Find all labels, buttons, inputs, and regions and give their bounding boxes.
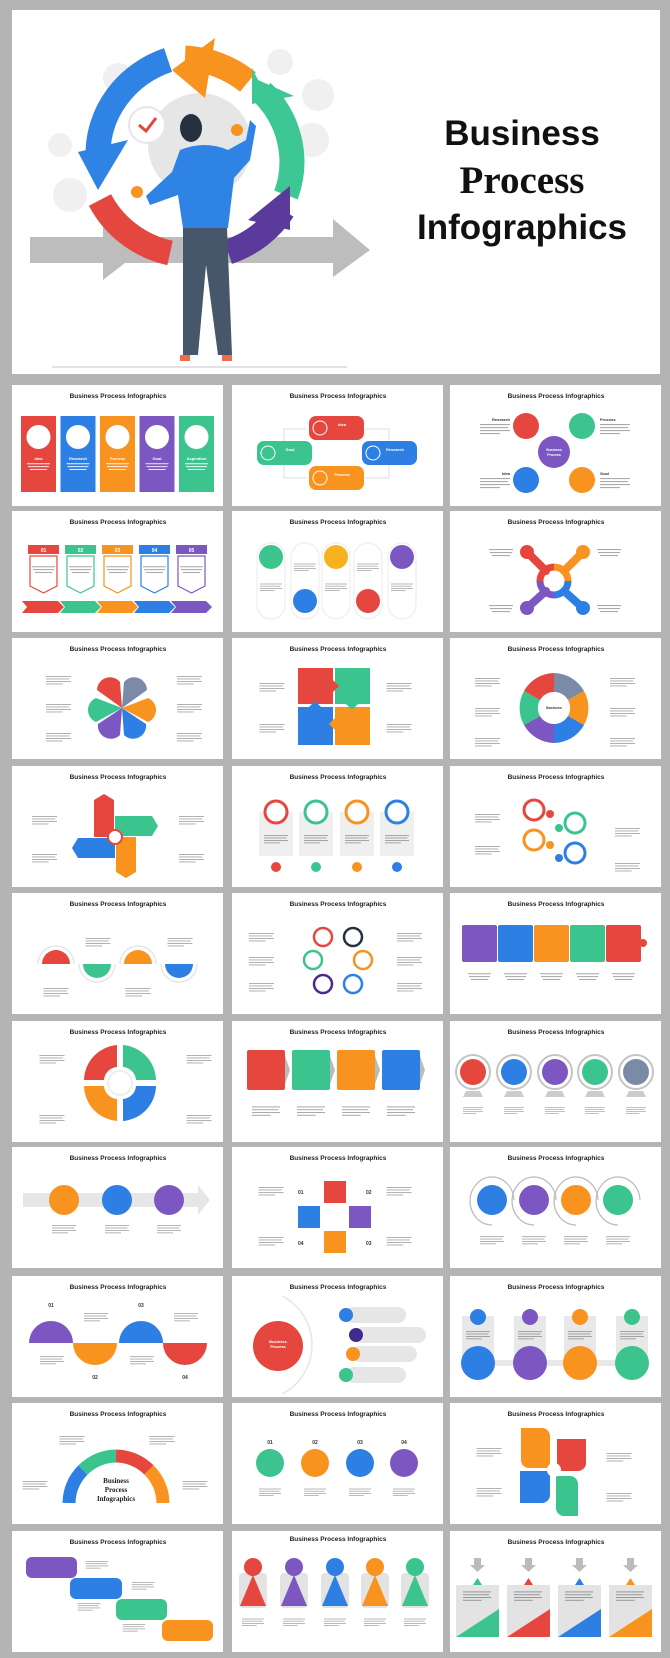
- panel 12: linked rings: Business Process Infographics: [508, 774, 605, 781]
- panel 9: segmented ring: Business: [546, 706, 562, 710]
- panel 20: four squares: 03: [366, 1241, 372, 1247]
- panel 2: pills cycle: [232, 385, 443, 506]
- panel 4: numbered steps with arrows: 02: [78, 548, 83, 554]
- panel 6: ring with corner circles: [450, 511, 661, 632]
- panel 4: numbered steps with arrows: 04: [152, 548, 157, 554]
- panel 23: big circle with list: Process: [270, 1344, 287, 1349]
- panel 4: numbered steps with arrows: [12, 511, 223, 632]
- panel 20: four squares: [232, 1147, 443, 1268]
- panel 4: numbered steps with arrows: 01: [41, 548, 46, 554]
- panel 25: arch: Process: [105, 1486, 127, 1494]
- panel 2: pills cycle: Process: [334, 472, 351, 477]
- panel 25: arch: [12, 1403, 223, 1524]
- panel 25: arch: Business: [103, 1477, 129, 1485]
- panel 29: triangles with numbers: [232, 1531, 443, 1652]
- panel 20: four squares: 02: [366, 1190, 372, 1196]
- panel 3: hub circles: Business: [546, 448, 562, 452]
- panel 22: wave halves: 04: [182, 1375, 188, 1381]
- panel 5: alternating circles: [232, 511, 443, 632]
- panel 11: ring cards: Business Process Infographics: [290, 774, 387, 781]
- panel 4: numbered steps with arrows: 03: [115, 548, 120, 554]
- panel 12: linked rings: [450, 766, 661, 887]
- panel 27: leaf quadrants: [450, 1403, 661, 1524]
- panel 20: four squares: 01: [298, 1190, 304, 1196]
- panel 20: four squares: 04: [298, 1241, 304, 1247]
- panel 4: numbered steps with arrows: 05: [189, 548, 194, 554]
- panel 3: hub circles: Process: [600, 417, 616, 422]
- panel 23: big circle with list: Business: [269, 1339, 288, 1344]
- panel 29: triangles with numbers: Business Process Infographics: [290, 1536, 387, 1543]
- panel 25: arch: Business Process Infographics: [70, 1411, 167, 1418]
- illustration: gears background: [48, 49, 334, 212]
- panel 1: vertical cards: Research: [69, 456, 88, 461]
- panel 22: wave halves: 01: [48, 1303, 54, 1309]
- panel 17: chevron squares: Business Process Infographics: [290, 1029, 387, 1036]
- panel 17: chevron squares: [232, 1021, 443, 1142]
- panel 9: segmented ring: [450, 638, 661, 759]
- panel 3: hub circles: Idea: [502, 471, 511, 476]
- panel 28: staircase: [12, 1531, 223, 1652]
- hero title: Process: [460, 159, 584, 202]
- panel 8: puzzle squares: Business Process Infographics: [290, 646, 387, 653]
- panel 9: segmented ring: Business Process Infographics: [508, 646, 605, 653]
- hero title: Business: [444, 114, 600, 153]
- panel 15: puzzle row: Business Process Infographics: [508, 901, 605, 908]
- panel 1: vertical cards: Business Process Infographics: [70, 393, 167, 400]
- panel 25: arch: Infographics: [97, 1495, 135, 1503]
- panel 4: numbered steps with arrows: Business Process Infographics: [70, 519, 167, 526]
- panel 22: wave halves: 02: [92, 1375, 98, 1381]
- panel 15: puzzle row: [450, 893, 661, 1014]
- panel 1: vertical cards: Idea: [34, 456, 43, 461]
- panel 7: flower petals: [12, 638, 223, 759]
- panel 22: wave halves: [12, 1276, 223, 1397]
- panel 26: numbered circles: 02: [312, 1440, 318, 1446]
- panel 26: numbered circles: [232, 1403, 443, 1524]
- panel 3: hub circles: Process: [547, 453, 561, 457]
- illustration: cycle arrows: [98, 58, 292, 253]
- panel 10: hexagon cross: [12, 766, 223, 887]
- panel 16: quadrant circle: [12, 1021, 223, 1142]
- panel 2: pills cycle: Goal: [286, 447, 294, 452]
- panel 27: leaf quadrants: Business Process Infographics: [508, 1411, 605, 1418]
- panel 26: numbered circles: 01: [267, 1440, 273, 1446]
- panel 22: wave halves: Business Process Infographics: [70, 1284, 167, 1291]
- panel 30: arrow cards: [450, 1531, 661, 1652]
- panel 10: hexagon cross: Business Process Infographics: [70, 774, 167, 781]
- panel 7: flower petals: Business Process Infographics: [70, 646, 167, 653]
- panel 20: four squares: Business Process Infographics: [290, 1155, 387, 1162]
- panel 3: hub circles: Research: [492, 417, 511, 422]
- illustration: man: [52, 114, 347, 368]
- illustration: check bubble: [129, 107, 165, 143]
- panel 14: circle cycle: Business Process Infographics: [290, 901, 387, 908]
- panel 13: half circles: Business Process Infographics: [70, 901, 167, 908]
- panel 14: circle cycle: [232, 893, 443, 1014]
- panel 24: columns with big circles: [450, 1276, 661, 1397]
- panel 26: numbered circles: 03: [357, 1440, 363, 1446]
- hero title: [417, 114, 627, 247]
- panel 8: puzzle squares: [232, 638, 443, 759]
- panel 2: pills cycle: Research: [386, 447, 405, 452]
- panel 22: wave halves: 03: [138, 1303, 144, 1309]
- panel 16: quadrant circle: Business Process Infographics: [70, 1029, 167, 1036]
- panel 6: ring with corner circles: Business Process Infographics: [508, 519, 605, 526]
- illustration: grey arrow: [30, 219, 370, 277]
- panel 5: alternating circles: Business Process Infographics: [290, 519, 387, 526]
- panel 3: hub circles: [450, 385, 661, 506]
- panel 19: arrow with circles: Business Process Infographics: [70, 1155, 167, 1162]
- panel 11: ring cards: [232, 766, 443, 887]
- panel 3: hub circles: Goal: [600, 471, 609, 476]
- panel 13: half circles: [12, 893, 223, 1014]
- panel 19: arrow with circles: [12, 1147, 223, 1268]
- panel 23: big circle with list: Business Process Infographics: [290, 1284, 387, 1291]
- panel 21: circles with arcs: Business Process Infographics: [508, 1155, 605, 1162]
- panel 28: staircase: Business Process Infographics: [70, 1539, 167, 1546]
- panel 24: columns with big circles: Business Process Infographics: [508, 1284, 605, 1291]
- panel 21: circles with arcs: [450, 1147, 661, 1268]
- panel 2: pills cycle: Business Process Infographics: [290, 393, 387, 400]
- panel 26: numbered circles: Business Process Infographics: [290, 1411, 387, 1418]
- panel 1: vertical cards: Process: [110, 456, 126, 461]
- panel 2: pills cycle: Idea: [338, 422, 347, 427]
- panel 1: vertical cards: [12, 385, 223, 506]
- panel 1: vertical cards: Goal: [153, 456, 161, 461]
- panel 26: numbered circles: 04: [401, 1440, 407, 1446]
- hero title: Infographics: [417, 208, 627, 247]
- panel 23: big circle with list: [232, 1276, 443, 1397]
- panel 18: circle stands: [450, 1021, 661, 1142]
- panel 1: vertical cards: Aspiration: [187, 456, 207, 461]
- panel 3: hub circles: Business Process Infographics: [508, 393, 605, 400]
- panel 30: arrow cards: Business Process Infographics: [508, 1539, 605, 1546]
- hero panel: [12, 10, 660, 374]
- panel 18: circle stands: Business Process Infographics: [508, 1029, 605, 1036]
